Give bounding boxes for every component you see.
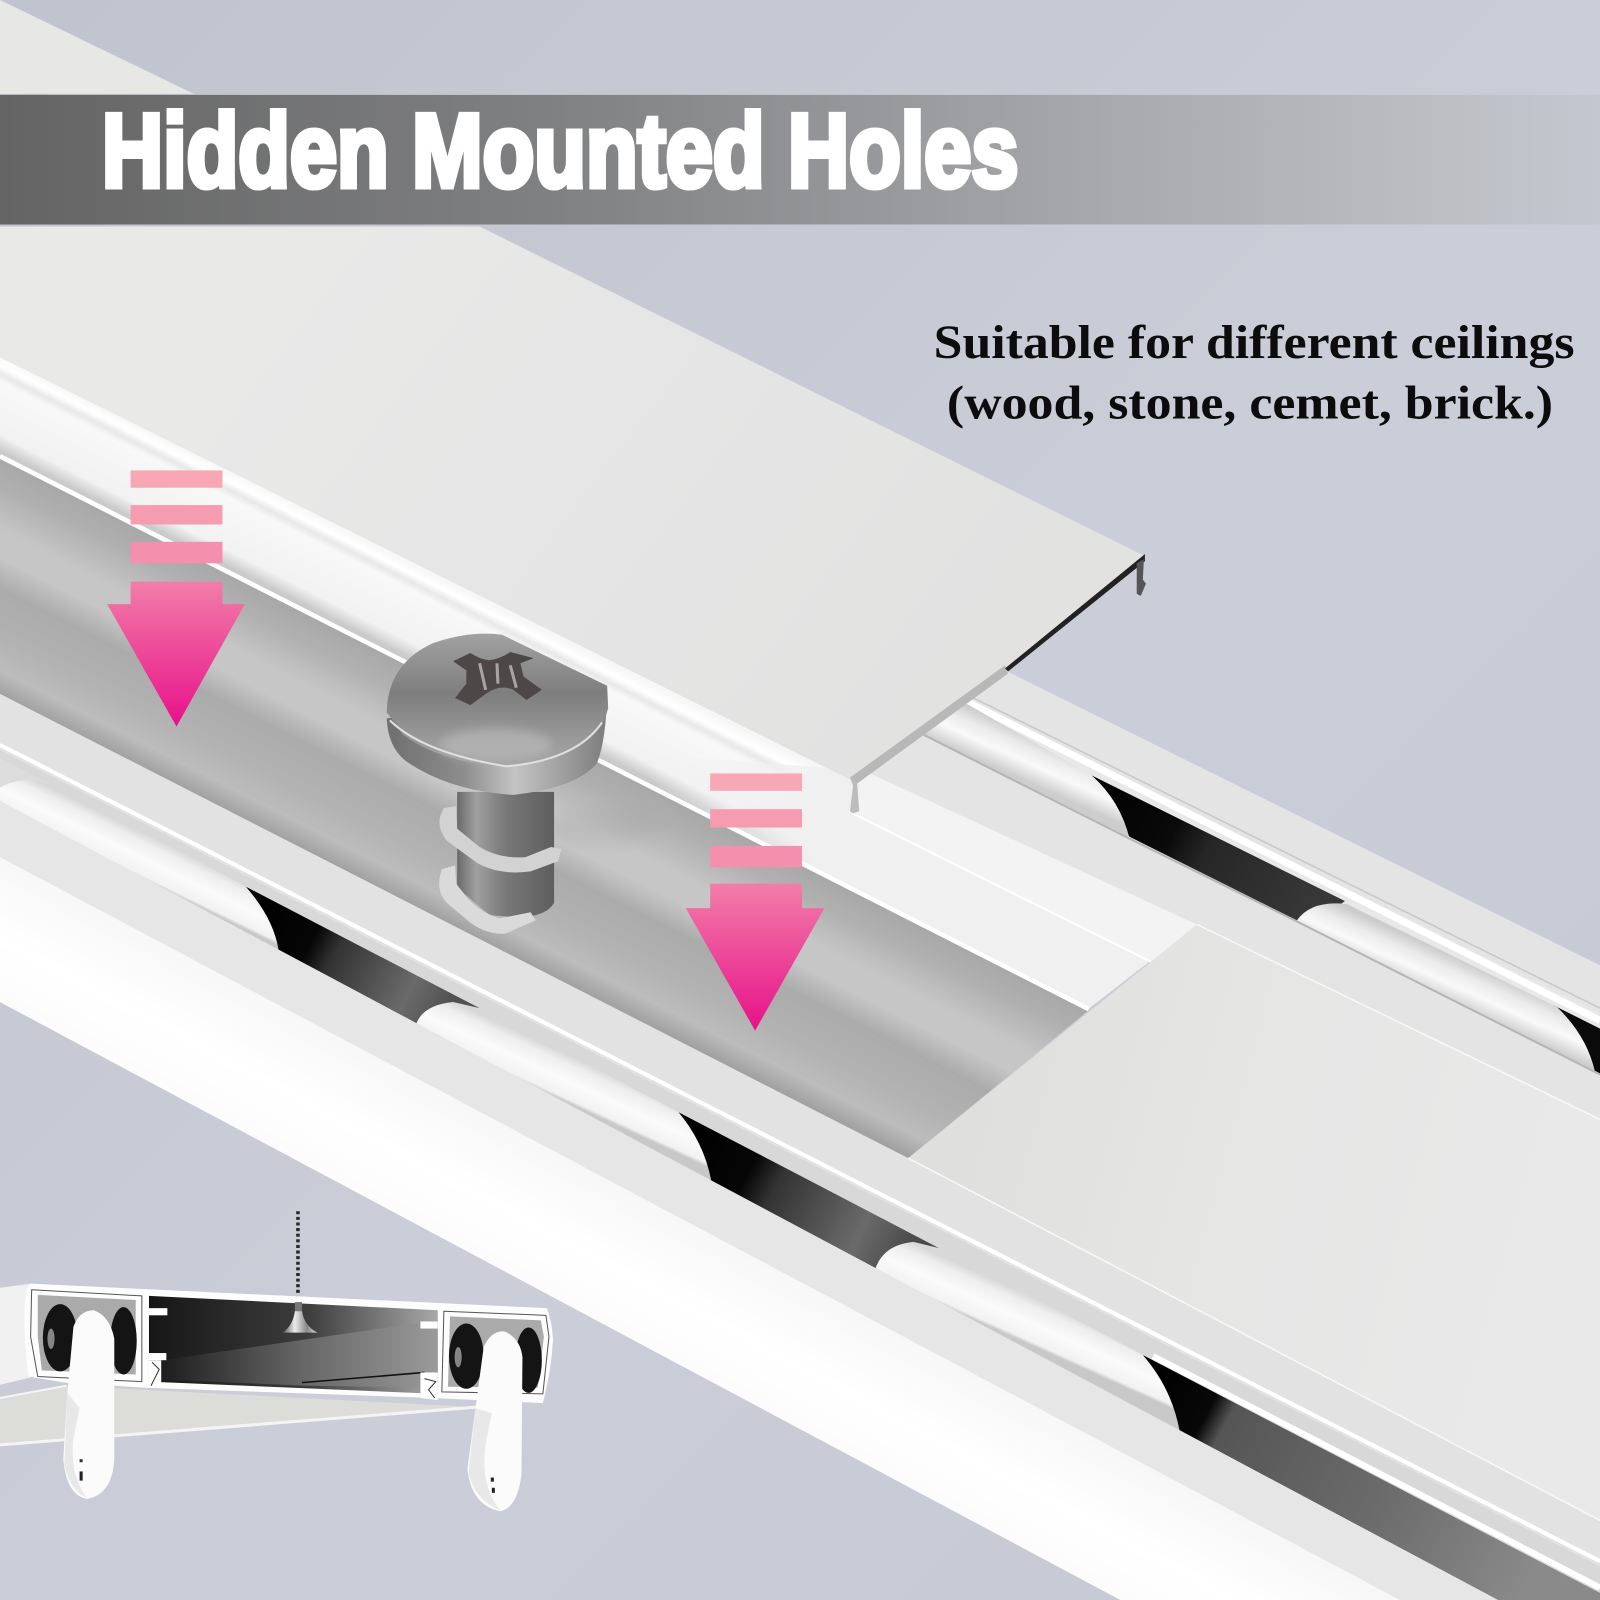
roller 3	[876, 1242, 1180, 1431]
channel top highlight	[0, 456, 1089, 1009]
screw in inset	[283, 1211, 317, 1333]
lower lip	[0, 694, 1600, 1600]
top-left ceiling rail piece	[0, 0, 194, 94]
lower thread	[439, 865, 536, 934]
far roller 2	[1297, 903, 1595, 1071]
title band	[0, 94, 1600, 224]
ceiling strip behind	[0, 1386, 477, 1445]
right hook	[1137, 559, 1146, 596]
far slot gap 1	[1092, 776, 1345, 923]
left hook	[850, 778, 859, 813]
detached cover strip	[0, 227, 1146, 813]
channel tabs	[149, 1308, 167, 1315]
right pocket	[448, 1316, 544, 1388]
far slot gap 2	[1553, 1005, 1600, 1073]
recessed channel	[0, 456, 1089, 1158]
rail face	[0, 857, 1400, 1600]
arrow 1	[107, 470, 245, 727]
far rail section with rollers	[852, 670, 1600, 1133]
slot gap 1	[246, 887, 480, 1041]
rail profile	[24, 1284, 553, 1403]
upper thread	[439, 806, 561, 872]
arrow 2	[686, 773, 824, 1031]
note line 2: (wood, stone, cemet, brick.)	[947, 376, 1553, 429]
left pocket	[38, 1295, 136, 1374]
note line 1: Suitable for different ceilings	[934, 316, 1574, 369]
roller 1	[0, 780, 279, 950]
second cover piece	[908, 924, 1600, 1520]
screw	[387, 634, 658, 934]
far roller 1	[923, 704, 1130, 839]
head rim	[387, 694, 607, 795]
roller 2	[416, 1002, 711, 1181]
slot gap 2	[679, 1112, 939, 1288]
shank	[457, 792, 554, 917]
upper lip of channel	[0, 357, 1197, 1010]
title: Hidden Mounted Holes	[102, 94, 1018, 210]
left black rollers	[43, 1304, 78, 1371]
left bracket	[63, 1310, 114, 1499]
inset cross-section diagram	[0, 1211, 553, 1511]
near roller slot	[0, 758, 1600, 1600]
slot gap 3	[1143, 1355, 1600, 1600]
note text	[934, 316, 1574, 429]
far slot band	[923, 700, 1600, 1073]
right black rollers	[449, 1323, 484, 1389]
right bracket	[467, 1331, 522, 1511]
phillips slot	[453, 652, 542, 705]
head rim highlight	[390, 720, 602, 766]
outer white rail	[0, 801, 1498, 1600]
cover end edge	[850, 665, 1008, 786]
channel interior	[149, 1296, 438, 1394]
head dome	[387, 634, 608, 766]
screw shadow	[546, 808, 658, 845]
